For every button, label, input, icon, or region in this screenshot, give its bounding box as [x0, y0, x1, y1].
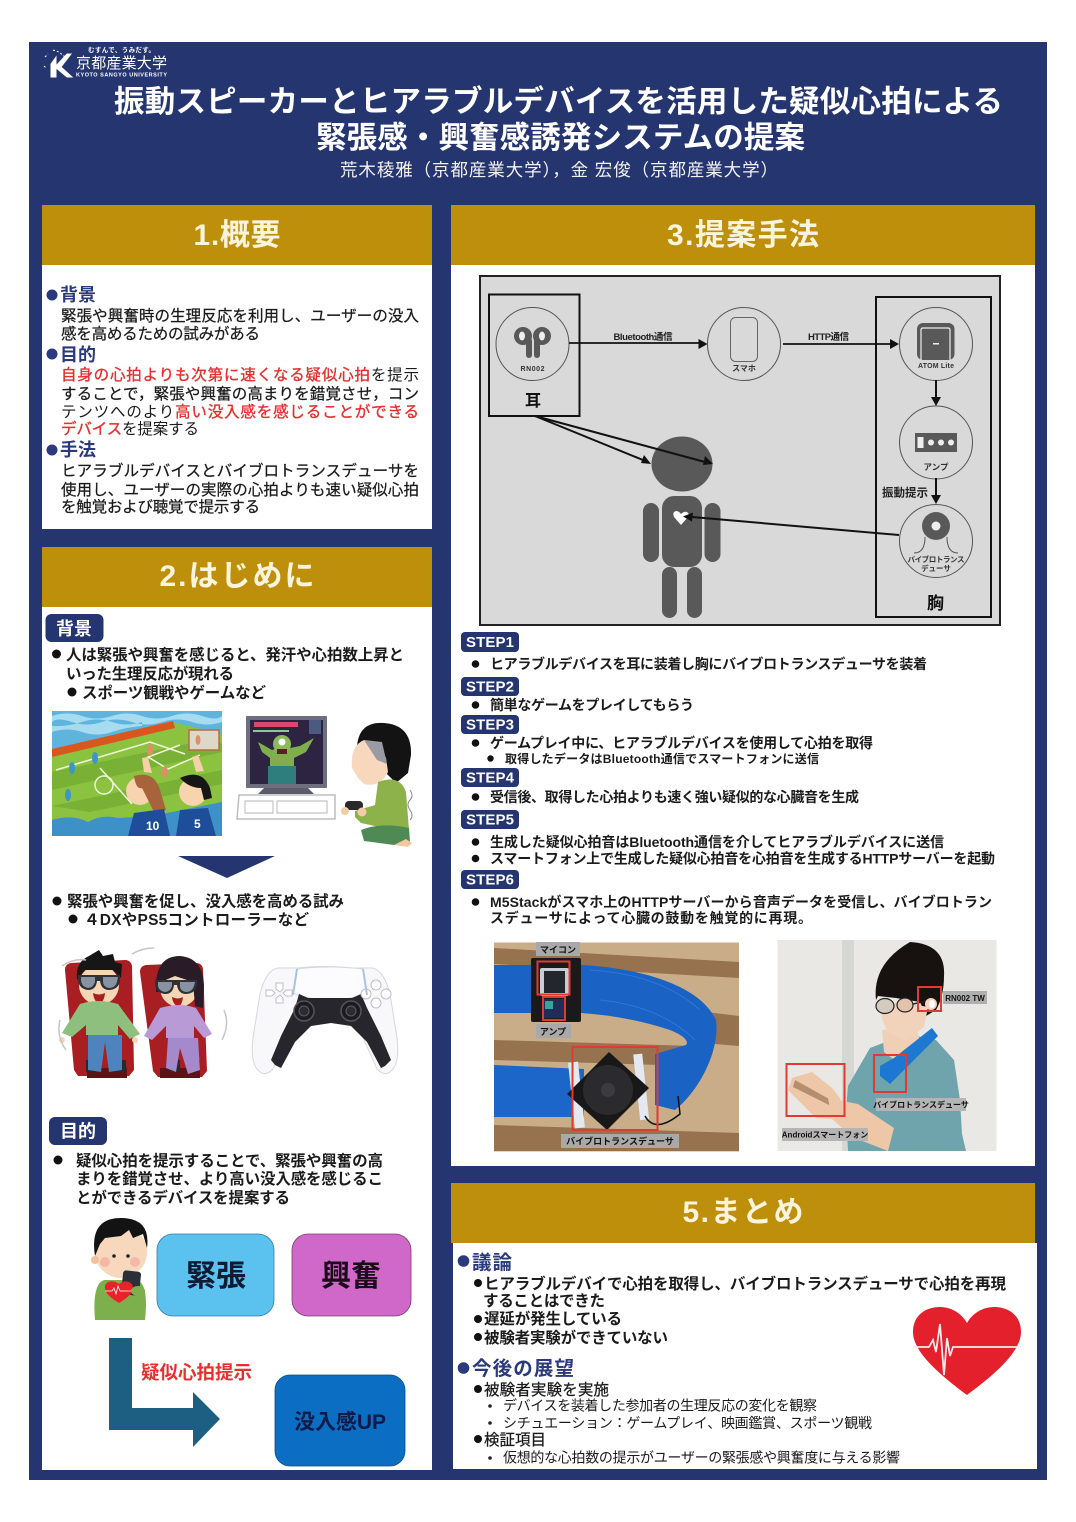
photo: belt device: [494, 942, 739, 1152]
system diagram: 振動提示: [882, 486, 928, 500]
illustration: person with phone and heart: [91, 1218, 147, 1320]
icon: earbuds: RN002: [520, 366, 545, 373]
steps: ゲームプレイ中に、ヒアラブルデバイスを使用して心拍を取得: [490, 735, 873, 751]
authors: 荒木稜雅（京都産業大学），金 宏俊（京都産業大学）: [340, 160, 778, 180]
tag: background: [46, 614, 104, 642]
photo: belt device: マイコン: [540, 945, 576, 955]
background bullets: スポーツ観戦やゲームなど: [82, 683, 266, 702]
steps: STEP1: [466, 634, 514, 651]
icon: vibration transducer: バイブロトランス: [908, 554, 964, 564]
purpose bullets: 疑似心拍を提示することで、緊張や興奮の高: [76, 1152, 383, 1170]
system diagram: 胸: [927, 594, 944, 613]
photo: wearing the device: RN002 TW: [945, 994, 985, 1003]
background bullets: 人は緊張や興奮を感じると、発汗や心拍数上昇と: [66, 645, 404, 664]
panel: 1. overview: ヒアラブルデバイスとバイブロトランスデューサを: [61, 461, 419, 480]
illustration: PS5 controller: [252, 966, 398, 1074]
icon: earbuds: [514, 327, 551, 373]
panel: 5. summary: 今後の展望: [472, 1358, 574, 1380]
background bullets: いった生理反応が現れる: [66, 664, 234, 683]
tag: purpose: [49, 1117, 107, 1145]
icon: ATOM Lite: ATOM Lite: [918, 363, 954, 370]
steps: 簡単なゲームをプレイしてもらう: [490, 697, 694, 713]
panel: 1. overview: 緊張や興奮時の生理反応を利用し、ユーザーの没入: [61, 307, 419, 325]
icon: human figure: [643, 436, 720, 618]
university logo: [44, 45, 167, 78]
box: tension: [157, 1234, 274, 1316]
steps: ヒアラブルデバイスを耳に装着し胸にバイブロトランスデューサを装着: [490, 656, 927, 672]
photo: belt device: バイブロトランスデューサ: [566, 1136, 674, 1146]
illustration: stadium spectators: 5: [194, 817, 201, 831]
university logo: むすんで、うみだす。: [88, 45, 155, 54]
system diagram: HTTP通信: [808, 331, 849, 343]
panel: 1. overview: 背景: [60, 285, 96, 305]
panel: 5. summary: 遅延が発生している: [484, 1309, 622, 1328]
bullets: attempts: ４DXやPS5コントローラーなど: [84, 911, 309, 929]
icon: ATOM Lite: [917, 323, 954, 370]
box: excitement: 興奮: [321, 1260, 381, 1293]
title: 振動スピーカーとヒアラブルデバイスを活用した疑似心拍による: [114, 84, 1003, 119]
panel: 1. overview: 使用し、ユーザーの実際の心拍よりも速い疑似心拍: [61, 481, 419, 499]
tag: purpose: 目的: [60, 1122, 96, 1142]
purpose bullets: とができるデバイスを提案する: [76, 1188, 290, 1207]
illustration: scared gamer at TV: [237, 716, 412, 847]
bullets: attempts: 緊張や興奮を促し、没入感を高める試み: [67, 892, 344, 910]
panel: 1. overview: 自身の心拍よりも次第に速くなる疑似心拍を提示: [61, 366, 419, 384]
purpose bullets: まりを錯覚させ、より高い没入感を感じるこ: [76, 1169, 383, 1188]
background bullets: [52, 645, 404, 702]
steps: スマートフォン上で生成した疑似心拍音を心拍音を生成するHTTPサーバーを起動: [490, 850, 995, 866]
box: immersion up: [275, 1375, 405, 1466]
panel: 1. overview: [42, 205, 432, 529]
panel: 5. summary: シチュエーション：ゲームプレイ、映画鑑賞、スポーツ観戦: [503, 1415, 872, 1431]
panel: 5. summary: 5.まとめ: [682, 1196, 804, 1229]
box: excitement: [292, 1234, 411, 1316]
panel: 5. summary: 議論: [472, 1252, 512, 1274]
panel: 5. summary: 検証項目: [484, 1431, 546, 1449]
icon: smartphone: [730, 318, 758, 373]
icon: amplifier: アンプ: [924, 462, 949, 472]
arrows: [535, 339, 941, 535]
photo: wearing the device: [778, 940, 996, 1151]
panel: 5. summary: デバイスを装着した参加者の生理反応の変化を観察: [503, 1398, 817, 1414]
steps: 生成した疑似心拍音はBluetooth通信を介してヒアラブルデバイスに送信: [490, 834, 944, 850]
panel: 1. overview: 手法: [60, 440, 96, 460]
icon: heart with ECG: [913, 1307, 1021, 1395]
panel: 2. introduction: 2.はじめに: [160, 560, 314, 593]
panel: 1. overview: することで，緊張や興奮の高まりを錯覚させ，コン: [61, 385, 419, 403]
steps: 取得したデータはBluetooth通信でスマートフォンに送信: [505, 751, 819, 766]
panel: 5. summary: [451, 1183, 1037, 1469]
photo: wearing the device: バイブロトランスデューサ: [873, 1100, 969, 1110]
purpose bullets: [54, 1152, 383, 1207]
bullets: attempts: [52, 892, 344, 929]
panel: 5. summary: 被験者実験ができていない: [484, 1328, 668, 1347]
system diagram: [480, 276, 1000, 625]
box: tension: 緊張: [186, 1260, 246, 1293]
panel: 1. overview: テンツへのより高い没入感を感じることができる: [61, 403, 419, 421]
steps: STEP4: [466, 770, 515, 786]
panel: 1. overview: を触覚および聴覚で提示する: [61, 498, 260, 516]
panel: 5. summary: 被験者実験を実施: [484, 1381, 609, 1399]
panel: 1. overview: デバイスを提案する: [61, 419, 199, 438]
panel: 5. summary: することはできた: [483, 1292, 605, 1310]
system diagram: Bluetooth通信: [614, 331, 673, 343]
system diagram: 耳: [525, 393, 541, 410]
panel: 2. introduction: [42, 547, 432, 1470]
photo: belt device: アンプ: [540, 1027, 566, 1037]
label: pseudo heartbeat: 疑似心拍提示: [141, 1362, 252, 1383]
icon: amplifier: [915, 433, 957, 472]
icon: smartphone: スマホ: [732, 364, 756, 373]
university logo: 京都産業大学: [76, 55, 167, 72]
steps: [461, 632, 995, 926]
steps: STEP6: [466, 872, 514, 888]
title: [114, 84, 1003, 155]
panel: 5. summary: ヒアラブルデバイで心拍を取得し、バイブロトランスデューサで心拍を再現: [484, 1274, 1006, 1293]
panel: 5. summary: 仮想的な心拍数の提示がユーザーの緊張感や興奮度に与える影響: [503, 1450, 900, 1466]
box: immersion up: 没入感UP: [294, 1410, 386, 1434]
panel: 1. overview: 目的: [60, 345, 96, 365]
arrow: elbow: [109, 1338, 220, 1447]
steps: STEP2: [466, 678, 514, 696]
title: 緊張感・興奮感誘発システムの提案: [316, 121, 805, 155]
panel: 3. proposed method: 3.提案手法: [667, 219, 819, 252]
steps: スデューサによって心臓の鼓動を触覚的に再現。: [490, 910, 812, 926]
illustration: 4DX seats: [59, 948, 227, 1078]
steps: 受信後、取得した心拍よりも速く強い疑似的な心臓音を生成: [490, 789, 859, 805]
arrow: down triangle: [178, 856, 275, 878]
illustration: stadium spectators: 10: [146, 819, 160, 833]
photo: wearing the device: Androidスマートフォン: [782, 1130, 868, 1140]
steps: STEP5: [466, 812, 514, 828]
panel: 1. overview: 感を高めるための試みがある: [61, 325, 260, 343]
icon: vibration transducer: デューサ: [921, 563, 951, 573]
panel: 1. overview: 1.概要: [194, 219, 280, 252]
university logo: KYOTO SANGYO UNIVERSITY: [76, 72, 167, 78]
icon: vibration transducer: [908, 512, 964, 573]
illustration: stadium spectators: [52, 711, 222, 836]
steps: STEP3: [466, 716, 514, 734]
panel: 3. proposed method: [451, 205, 1035, 1166]
tag: background: 背景: [56, 619, 92, 639]
steps: M5Stackがスマホ上のHTTPサーバーから音声データを受信し、バイブロトラン: [490, 894, 992, 910]
